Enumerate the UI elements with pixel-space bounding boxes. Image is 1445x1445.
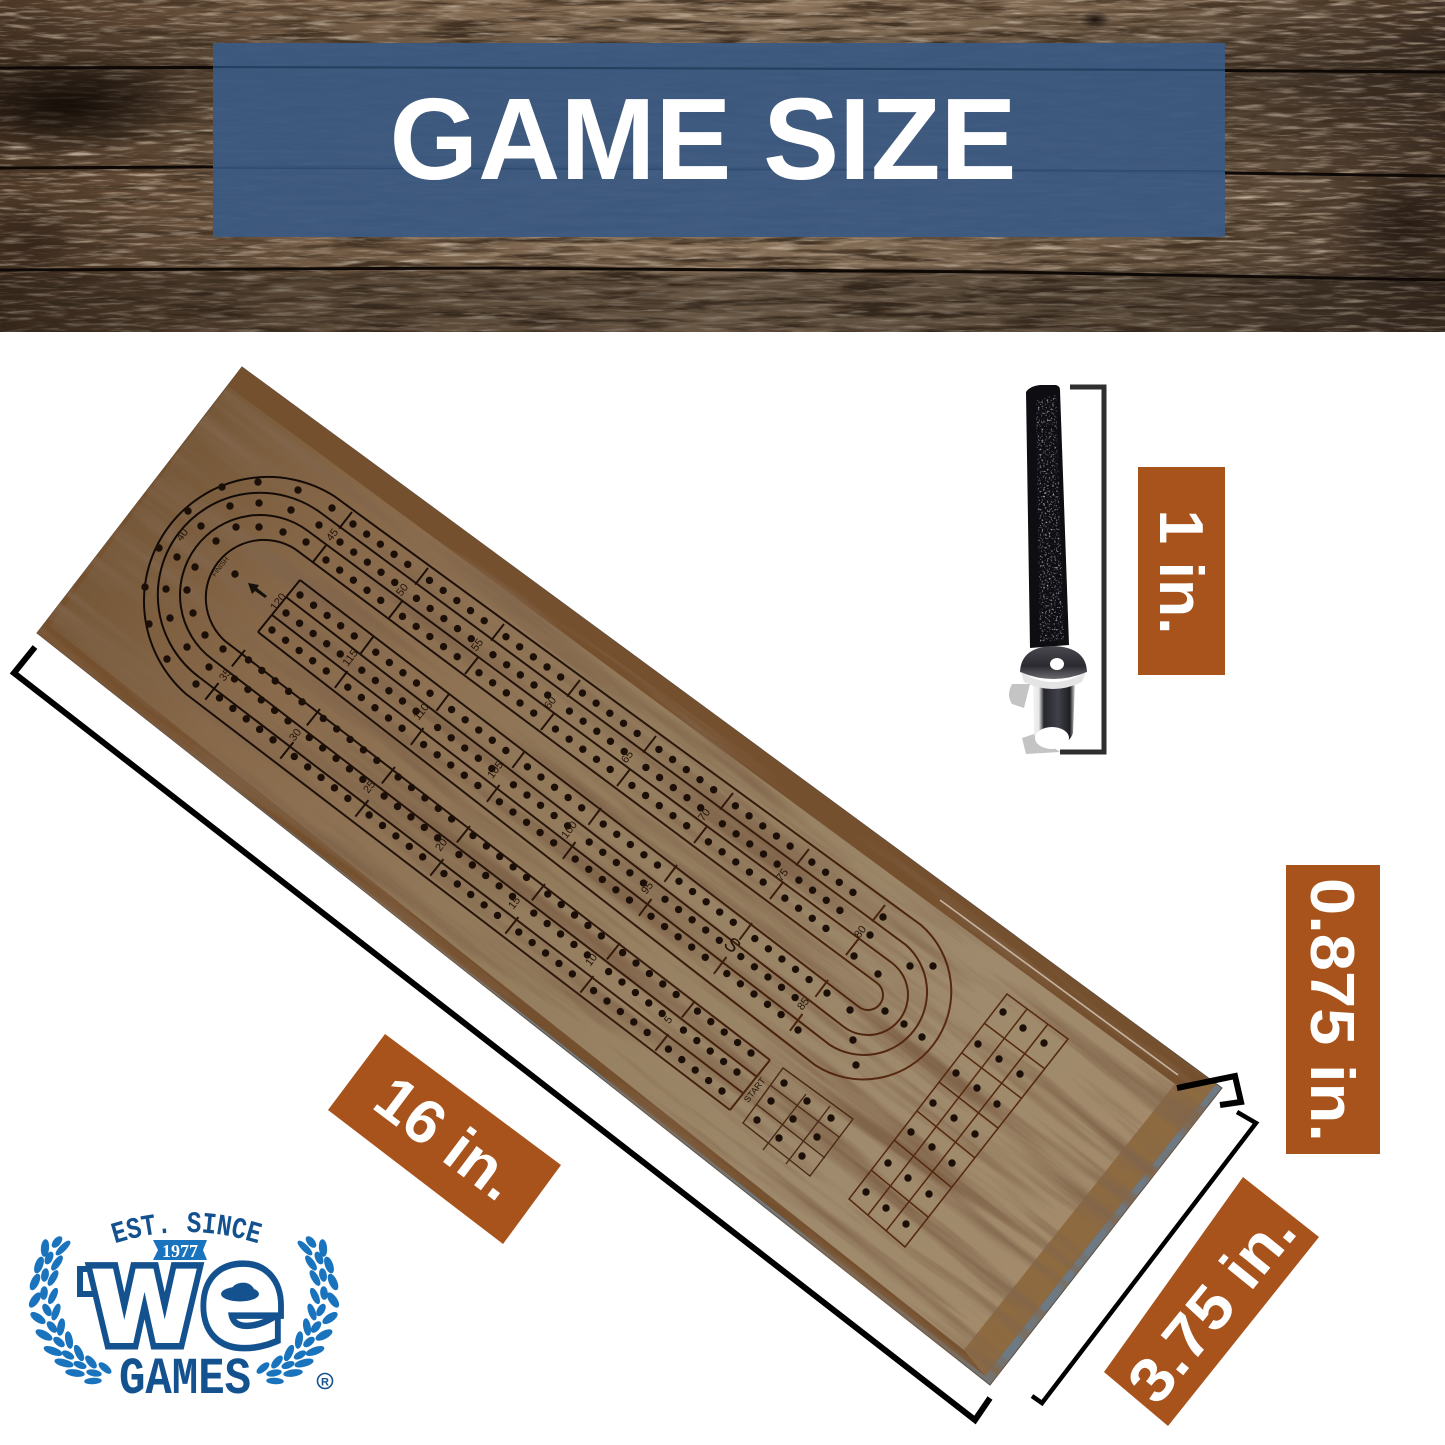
- track numbers: 120: [268, 591, 289, 613]
- title: GAME SIZE: [390, 74, 1016, 204]
- logo: 1977 ribbon: 1977: [162, 1241, 198, 1261]
- dimension bracket: board width: [1032, 1112, 1256, 1403]
- dimension label: 1 in.: 1 in.: [1146, 510, 1215, 634]
- peg track outlines: [144, 477, 951, 1110]
- track numbers: FINISH: [211, 556, 231, 578]
- logo: WE Games: [28, 1212, 340, 1409]
- track numbers: 40: [174, 527, 191, 544]
- arrow near finish: [248, 583, 267, 598]
- banner: blue title panel: [213, 43, 1225, 237]
- track numbers: 85: [795, 996, 812, 1013]
- peg: [1009, 385, 1087, 754]
- track numbers: 20: [433, 837, 450, 854]
- dimension label: 0.875 in.: [1286, 865, 1380, 1154]
- small score grid: [743, 1068, 853, 1176]
- dimension label: 0.875 in.: 0.875 in.: [1297, 878, 1366, 1142]
- logo: e counter: [221, 1286, 259, 1302]
- track numbers: 105: [485, 759, 506, 781]
- track numbers: 25: [361, 779, 378, 796]
- track numbers: 115: [341, 648, 361, 669]
- track numbers: START: [742, 1075, 768, 1105]
- dimension label: 1 in.: [1138, 467, 1225, 675]
- logo: we wordmark: we: [88, 1218, 284, 1376]
- dimension bracket: board thickness: [1177, 1076, 1241, 1105]
- track numbers: 75: [774, 867, 791, 884]
- peg shadow: [1009, 684, 1060, 754]
- track numbers: [174, 527, 869, 1105]
- dimension bracket: board length: [14, 647, 990, 1420]
- track numbers: 50: [394, 582, 411, 599]
- track numbers: 15: [506, 895, 523, 912]
- cribbage board: [25, 348, 1222, 1388]
- track numbers: 70: [696, 807, 713, 824]
- track numbers: 95: [639, 880, 656, 897]
- board silhouette and bevels: [25, 348, 1222, 1388]
- track numbers: 80: [852, 924, 869, 941]
- track numbers: 65: [619, 749, 636, 766]
- peg holes: straight rows: [217, 524, 866, 1091]
- five-point dividers: [205, 512, 885, 1051]
- logo: games: GAMES: [119, 1350, 251, 1409]
- track numbers: 110: [412, 702, 432, 723]
- peg ball and base: [1020, 646, 1087, 749]
- dimension bracket: peg length: [1060, 387, 1104, 752]
- logo: w flag serif: [80, 1269, 104, 1294]
- header: wood plank background: [0, 0, 1445, 332]
- track numbers: 60: [542, 695, 559, 712]
- logo: est. since: [110, 1212, 262, 1244]
- logo: right laurel: [256, 1235, 340, 1384]
- large score grid: [849, 994, 1068, 1247]
- peg shaft: [1026, 385, 1069, 648]
- logo: registered mark: R: [321, 1376, 329, 1388]
- track numbers: 10: [583, 952, 600, 969]
- logo: 1977 ribbon: [153, 1240, 207, 1261]
- logo: est. since: EST. SINCE: [110, 1212, 262, 1244]
- track numbers: 30: [287, 727, 304, 744]
- track numbers: 100: [559, 819, 580, 841]
- track numbers: 45: [324, 527, 341, 544]
- track numbers: S: [720, 932, 744, 958]
- track numbers: 35: [217, 667, 234, 684]
- logo: registered mark: [318, 1374, 332, 1388]
- logo: left laurel: [28, 1235, 112, 1384]
- track numbers: 5: [662, 1014, 675, 1026]
- dimension label: 16 in.: 16 in.: [362, 1063, 531, 1214]
- dimension label: 3.75 in.: 3.75 in.: [1114, 1198, 1310, 1416]
- peg holes: curved ends: [141, 478, 937, 1069]
- track numbers: 55: [469, 637, 486, 654]
- dimension label: 16 in.: [328, 1034, 561, 1244]
